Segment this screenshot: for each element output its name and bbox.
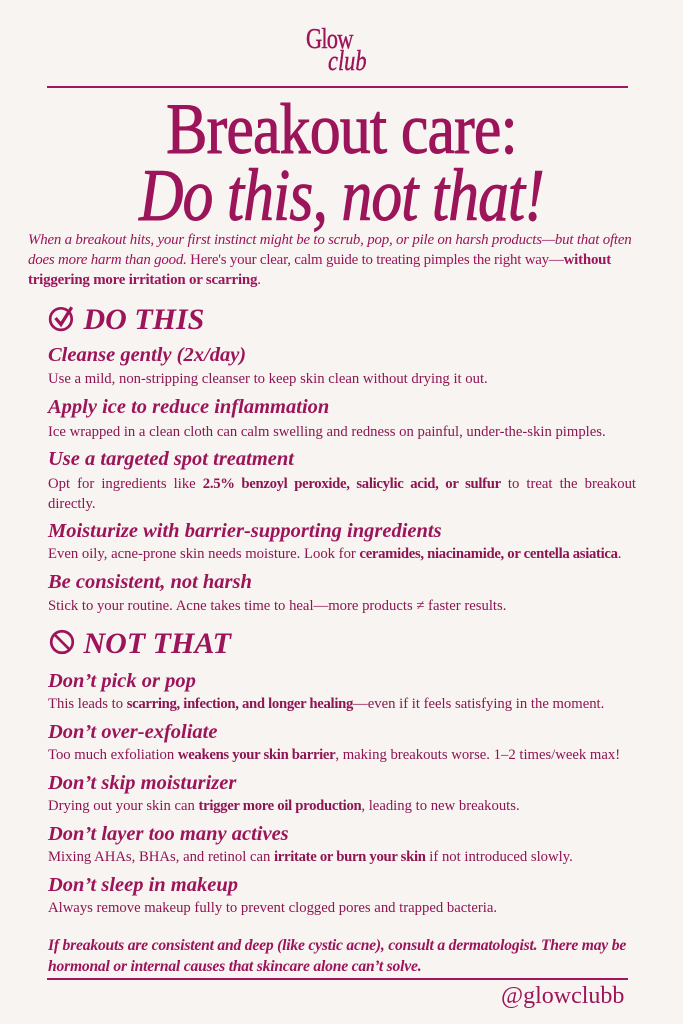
intro text: When a breakout hits, your first instinct might be to scrub, pop, or pile on harsh products—but that often: [28, 232, 632, 248]
do list: Stick to your routine. Acne takes time to heal—more products ≠ faster results.: [48, 598, 506, 614]
not list: Don’t skip moisturizer: [48, 772, 236, 794]
title: Breakout care:: [166, 89, 517, 169]
do list: Even oily, acne-prone skin needs moisture. Look for ceramides, niacinamide, or centella asiatica.: [48, 546, 621, 562]
do list: Use a targeted spot treatment: [48, 448, 294, 470]
not list: This leads to scarring, infection, and longer healing—even if it feels satisfying in the moment.: [48, 696, 604, 712]
do list: Ice wrapped in a clean cloth can calm swelling and redness on painful, under-the-skin pimples.: [48, 424, 606, 440]
do list: [46, 344, 636, 614]
not list: Don’t sleep in makeup: [48, 874, 238, 896]
not list: Drying out your skin can trigger more oil production, leading to new breakouts.: [48, 798, 520, 814]
logo: club: [328, 46, 367, 77]
DO THIS heading: DO THIS: [84, 303, 204, 336]
footnote: If breakouts are consistent and deep (like cystic acne), consult a dermatologist. There may be: [48, 937, 626, 954]
handle: @glowclubb: [501, 983, 624, 1009]
footnote: hormonal or internal causes that skincare alone can’t solve.: [48, 958, 421, 975]
title: [138, 89, 544, 237]
intro text: triggering more irritation or scarring.: [28, 272, 261, 288]
intro text: [28, 232, 632, 288]
not list: Mixing AHAs, BHAs, and retinol can irritate or burn your skin if not introduced slowly.: [48, 849, 573, 865]
intro text: does more harm than good. Here's your clear, calm guide to treating pimples the right way—without: [28, 252, 611, 268]
not list: [48, 670, 620, 916]
logo: [306, 24, 367, 77]
do list: Opt for ingredients like 2.5% benzoyl peroxide, salicylic acid, or sulfur to treat the breakout directly.: [48, 476, 636, 512]
not list: Don’t over-exfoliate: [48, 721, 217, 743]
do list: Use a mild, non-stripping cleanser to keep skin clean without drying it out.: [48, 371, 488, 387]
do list: Apply ice to reduce inflammation: [48, 396, 329, 418]
footnote: [48, 937, 626, 975]
logo: Glow: [306, 24, 353, 55]
do list: Be consistent, not harsh: [48, 571, 252, 593]
not list: Too much exfoliation weakens your skin barrier, making breakouts worse. 1–2 times/week max!: [48, 747, 620, 763]
do list: Moisturize with barrier-supporting ingredients: [48, 520, 442, 542]
not list: Don’t layer too many actives: [48, 823, 289, 845]
NOT THAT heading: NOT THAT: [84, 627, 231, 660]
do list: Cleanse gently (2x/day): [48, 344, 246, 366]
title: Do this, not that!: [139, 155, 544, 237]
not list: Always remove makeup fully to prevent clogged pores and trapped bacteria.: [48, 900, 497, 916]
not list: Don’t pick or pop: [48, 670, 196, 692]
